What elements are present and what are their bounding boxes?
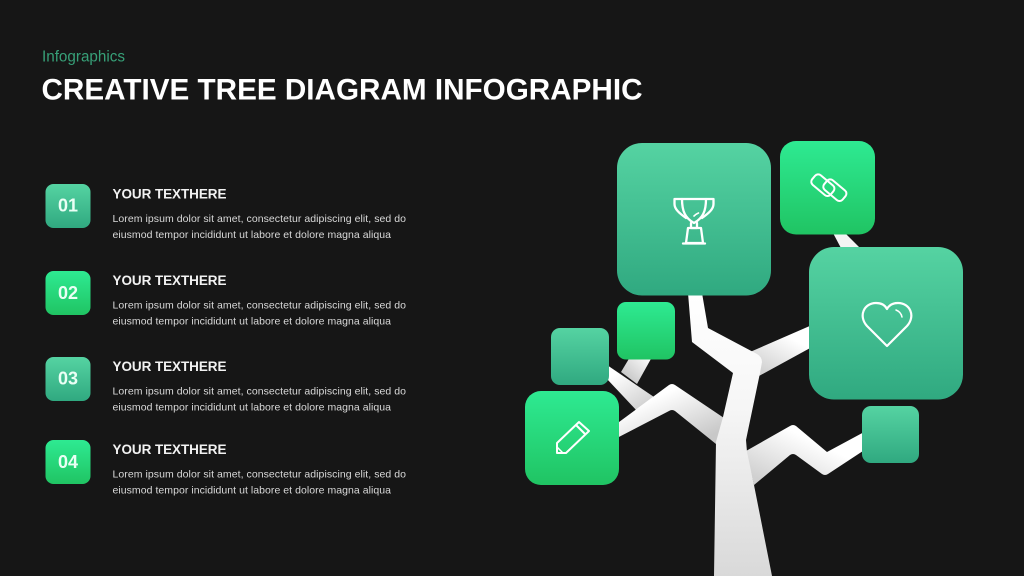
list item 01: Lorem ipsum dolor sit amet, consectetur adipiscing elit, sed do <box>112 213 406 225</box>
right branch to heart <box>750 325 812 376</box>
icon: trophy <box>674 199 714 244</box>
list item 04: Lorem ipsum dolor sit amet, consectetur adipiscing elit, sed do <box>112 468 406 480</box>
small upper left twig <box>621 357 652 384</box>
list item 03: Lorem ipsum dolor sit amet, consectetur adipiscing elit, sed do <box>112 386 406 398</box>
list item 04: 04 <box>58 452 78 472</box>
node: small green <box>617 302 675 360</box>
node: small teal left <box>551 328 609 385</box>
list item 02 <box>46 271 406 328</box>
title: CREATIVE TREE DIAGRAM INFOGRAPHIC <box>42 74 642 106</box>
list item 01: YOUR TEXTHERE <box>112 186 226 202</box>
icon: pencil <box>557 422 589 453</box>
tree <box>607 233 866 576</box>
eyebrow label: Infographics <box>42 48 125 66</box>
list item 02: YOUR TEXTHERE <box>112 273 226 288</box>
list item 02: 02 <box>58 283 78 303</box>
list item 03: YOUR TEXTHERE <box>112 359 226 374</box>
node: link <box>780 141 875 234</box>
list item 03: 03 <box>58 368 78 388</box>
lower right zigzag branch <box>746 425 866 485</box>
list item 03: eiusmod tempor incididunt ut labore et dolore magna aliqua <box>112 402 391 414</box>
top right branch <box>833 233 862 250</box>
list item 02: Lorem ipsum dolor sit amet, consectetur adipiscing elit, sed do <box>112 300 406 312</box>
small left branch <box>607 365 654 411</box>
list item 04 <box>46 440 406 496</box>
node: heart <box>809 247 963 400</box>
icon: chain link <box>810 173 848 203</box>
list item 02: eiusmod tempor incididunt ut labore et dolore magna aliqua <box>112 316 391 328</box>
list item 03 <box>46 357 406 414</box>
list item 04: eiusmod tempor incididunt ut labore et dolore magna aliqua <box>112 484 391 496</box>
node: trophy <box>617 143 771 296</box>
list item 01: 01 <box>58 196 78 216</box>
node: pencil <box>525 391 619 485</box>
icon: heart <box>863 303 911 346</box>
list item 01 <box>46 184 406 241</box>
list item 04: YOUR TEXTHERE <box>112 442 226 457</box>
trunk <box>688 293 772 576</box>
node: small teal right <box>862 406 919 463</box>
left zigzag branch <box>615 384 724 444</box>
list item 01: eiusmod tempor incididunt ut labore et dolore magna aliqua <box>112 229 391 241</box>
